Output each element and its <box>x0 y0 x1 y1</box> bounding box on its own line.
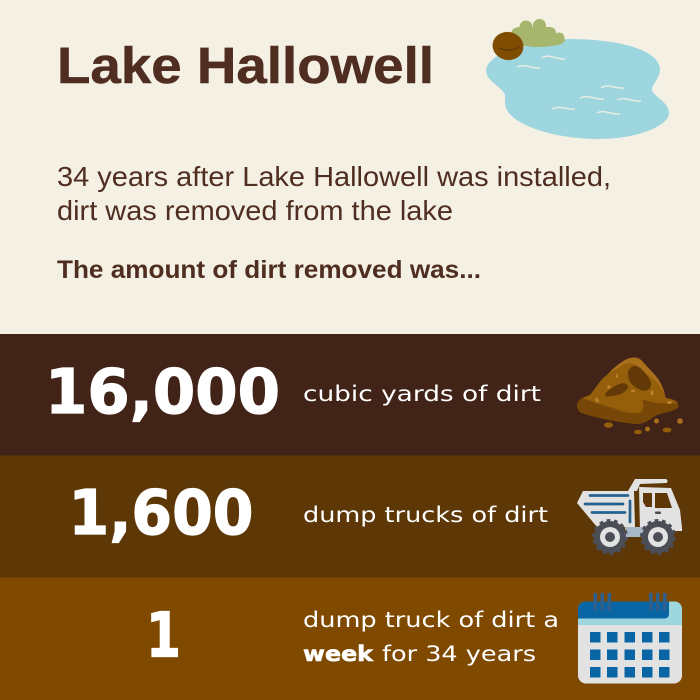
band <box>0 334 700 456</box>
crumbs <box>604 418 683 434</box>
pile body <box>577 363 678 424</box>
truck bed <box>577 491 635 527</box>
pile specks <box>594 374 672 404</box>
icon: calendar <box>578 593 682 684</box>
label: dump truck of dirt a week for 34 years: dump truck of dirt a <box>303 608 559 632</box>
calendar header light <box>578 602 682 625</box>
label: dump trucks of dirt: dump trucks of dirt <box>303 503 548 527</box>
intro text: dirt was removed from the lake <box>57 195 453 226</box>
rock crease <box>500 46 520 50</box>
pile highlight <box>592 357 665 410</box>
water ripples <box>517 56 641 114</box>
pile dark patch left <box>605 383 628 397</box>
panel: dump trucks <box>0 456 700 578</box>
calendar header dark <box>578 602 669 618</box>
pile dark patch upper <box>628 366 651 391</box>
panel: one truck a week <box>0 578 700 700</box>
icon: dirt pile <box>577 357 683 434</box>
label: cubic yards of dirt: cubic yards of dirt <box>303 382 541 406</box>
bed stripes <box>585 496 630 522</box>
pile shadow base <box>577 398 678 424</box>
intro text: 34 years after Lake Hallowell was installed, <box>57 161 611 192</box>
band <box>0 456 700 578</box>
calendar body <box>578 602 682 684</box>
lake water <box>486 39 669 139</box>
band <box>0 578 700 700</box>
cab window left <box>643 493 652 507</box>
icon: dump truck <box>577 479 682 553</box>
icon: lake with bush and rock <box>486 19 669 139</box>
subheading: The amount of dirt removed was... <box>57 256 481 284</box>
label: dump truck of dirt a week for 34 years: week <box>303 642 374 666</box>
panel: cubic yards <box>0 334 700 456</box>
bush <box>511 19 565 47</box>
rear wheel <box>642 521 674 553</box>
front wheel <box>594 521 626 553</box>
bed canopy <box>628 479 668 491</box>
chassis <box>625 527 645 537</box>
rock <box>490 29 526 63</box>
title: Lake Hallowell <box>57 37 434 94</box>
cab <box>639 487 682 531</box>
cab window right <box>655 493 672 508</box>
cab vent <box>655 512 661 514</box>
number: 16,000: 16,000 <box>45 356 280 428</box>
number: 1: 1 <box>146 600 181 672</box>
binder rings <box>594 593 666 611</box>
date grid <box>590 632 670 678</box>
number: 1,600: 1,600 <box>68 477 254 549</box>
label: dump truck of dirt a week for 34 years: for 34 years <box>382 642 536 666</box>
